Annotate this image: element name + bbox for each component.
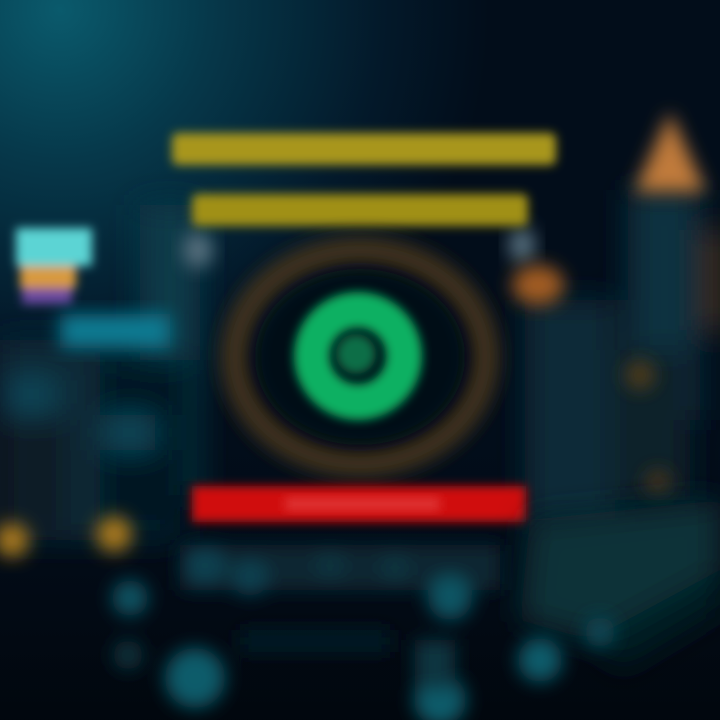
icon: small light near the title, right	[509, 227, 535, 263]
icon: orange lamp right of ring	[512, 265, 564, 305]
control panel of teal dots	[112, 545, 615, 720]
red banner	[192, 486, 526, 522]
outer bronze ring	[235, 251, 485, 463]
banner label	[285, 497, 440, 511]
green ring hub	[336, 334, 376, 374]
right conveyor platform	[520, 500, 720, 670]
left skyline buildings	[0, 205, 200, 540]
left orange lights	[0, 516, 132, 557]
teal sign bar	[60, 314, 170, 348]
right skyline buildings	[525, 190, 720, 520]
icon: dim orange lights on right	[625, 360, 671, 495]
icon: colourful sign at left	[16, 228, 92, 304]
ring chart	[235, 251, 485, 463]
icon: orange tower top	[634, 112, 706, 192]
ring centre	[255, 269, 465, 445]
icon: small light near the title, left	[183, 232, 213, 268]
title	[172, 133, 556, 226]
green ring	[312, 310, 404, 402]
title line 2	[192, 194, 528, 226]
title line 1	[172, 133, 556, 165]
